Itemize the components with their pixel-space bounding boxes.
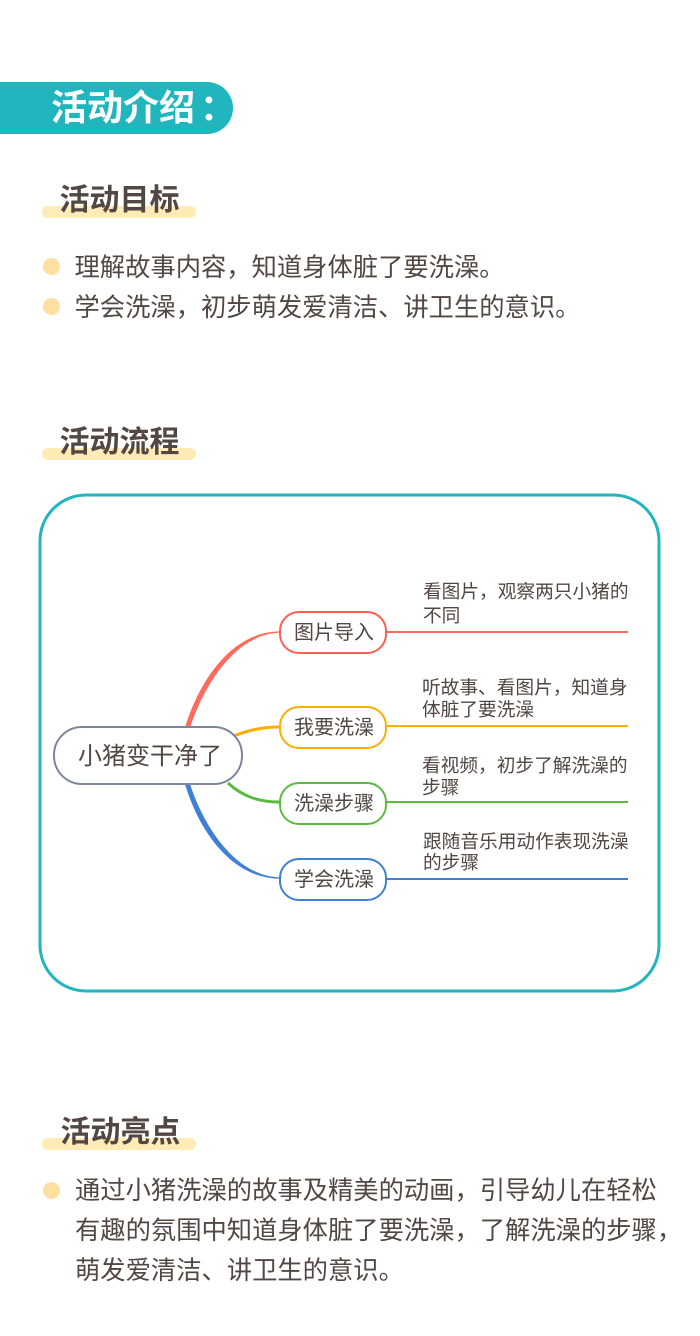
branch: picture intro: 图片导入 — [294, 621, 374, 644]
branch: picture intro — [185, 581, 629, 728]
branch: learn to wash: 的步骤 — [423, 852, 479, 873]
branch: I want a bath: 听故事、看图片，知道身 — [422, 677, 628, 698]
panel frame — [40, 495, 659, 991]
branch: picture intro: 不同 — [423, 605, 460, 626]
heading: activity highlights: 活动亮点 — [60, 1116, 180, 1148]
branch: I want a bath: 体脏了要洗澡 — [422, 699, 534, 720]
highlight line 3: 萌发爱清洁、讲卫生的意识。 — [75, 1257, 404, 1285]
branch: washing steps: 看视频，初步了解洗澡的 — [422, 755, 628, 776]
bullet — [43, 1182, 60, 1199]
heading: activity flow: 活动流程 — [60, 426, 180, 458]
highlight line 1: 通过小猪洗澡的故事及精美的动画，引导幼儿在轻松 — [75, 1177, 657, 1205]
branch: washing steps: 洗澡步骤 — [294, 792, 374, 815]
central node — [54, 727, 242, 784]
title banner — [0, 82, 233, 134]
bullet 1 — [43, 258, 60, 275]
branch: washing steps — [228, 755, 628, 824]
heading: activity goals: 活动目标 — [60, 184, 180, 216]
branch: washing steps: 步骤 — [422, 777, 459, 798]
goal text 1: 理解故事内容，知道身体脏了要洗澡。 — [74, 254, 505, 282]
branch: picture intro: 看图片，观察两只小猪的 — [423, 581, 629, 602]
panel: highlights text — [43, 1177, 682, 1285]
banner title text: 活动介绍： — [51, 87, 236, 128]
branch: I want a bath — [234, 677, 628, 748]
branch: I want a bath: 我要洗澡 — [294, 716, 374, 739]
goal text 2: 学会洗澡，初步萌发爱清洁、讲卫生的意识。 — [74, 294, 580, 322]
central node: 小猪变干净了 — [78, 743, 222, 770]
branch: learn to wash: 学会洗澡 — [294, 868, 374, 891]
branch: learn to wash: 跟随音乐用动作表现洗澡 — [423, 831, 629, 852]
panel: goals list — [43, 254, 580, 322]
highlight line 2: 有趣的氛围中知道身体脏了要洗澡，了解洗澡的步骤， — [75, 1217, 682, 1245]
branch: learn to wash — [185, 784, 629, 900]
bullet 2 — [43, 298, 60, 315]
